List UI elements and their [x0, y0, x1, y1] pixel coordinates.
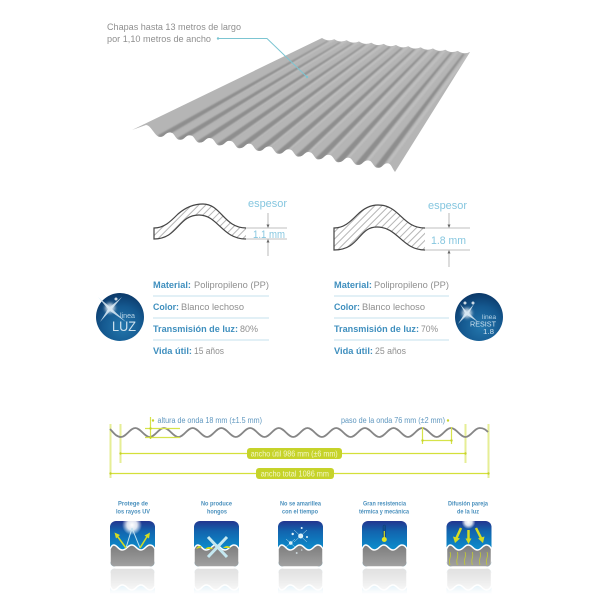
corrugated sheet illustration — [132, 38, 470, 172]
thickness dimension 1.1 mm: espesor — [248, 198, 287, 210]
thickness dimension 1.8 mm — [425, 200, 470, 267]
spec list: linea RESIST 1.8: Polipropileno (PP) — [374, 280, 449, 290]
badge: linea RESIST 1.8: RESIST — [470, 320, 496, 328]
badge: linea RESIST 1.8: 1.8 — [483, 327, 494, 336]
spec list: linea LUZ: Transmisión de luz: — [153, 324, 238, 334]
spec list: linea RESIST 1.8 — [334, 280, 449, 356]
feature: even light diffusion: Difusión pareja — [448, 501, 488, 508]
profile section 1.1 mm — [154, 204, 246, 239]
wave height dimension — [145, 416, 262, 439]
spec list: linea RESIST 1.8: Transmisión de luz: — [334, 324, 419, 334]
spec list: linea RESIST 1.8: Material: — [334, 280, 372, 290]
feature: no fungus: No produce — [201, 501, 232, 508]
spec list: linea LUZ: Vida útil: — [153, 346, 192, 356]
spec list: linea RESIST 1.8: Color: — [334, 302, 360, 312]
feature: UV protection — [110, 501, 155, 600]
useful width pill — [119, 448, 467, 459]
spec list: linea LUZ: 15 años — [194, 346, 224, 356]
feature: UV protection: Protege de — [118, 501, 148, 508]
badge: linea LUZ — [96, 293, 144, 341]
spec list: linea LUZ: Material: — [153, 280, 191, 290]
wave height dimension: altura de onda 18 mm (±1.5 mm) — [158, 416, 262, 425]
spec list: linea RESIST 1.8: Blanco lechoso — [362, 302, 425, 312]
thickness dimension 1.8 mm: 1.8 mm — [431, 235, 466, 247]
feature: no yellowing: con el tiempo — [282, 509, 318, 516]
feature: even light diffusion — [446, 501, 492, 600]
total width pill — [109, 468, 490, 479]
badge: linea RESIST 1.8: linea — [482, 314, 496, 321]
total width pill: ancho total 1086 mm — [261, 470, 329, 478]
spec list: linea RESIST 1.8: 25 años — [375, 346, 406, 356]
badge: linea LUZ: LUZ — [112, 318, 136, 334]
feature: no fungus — [194, 501, 239, 600]
width dimension guides — [110, 424, 489, 478]
sheet size note: por 1,10 metros de ancho — [107, 34, 211, 44]
thickness dimension 1.8 mm: espesor — [428, 200, 467, 212]
badge: linea RESIST 1.8 — [455, 293, 503, 341]
profile section 1.8 mm — [334, 205, 425, 250]
feature: no yellowing — [278, 501, 323, 600]
feature: no fungus: hongos — [207, 509, 227, 516]
wave pitch dimension: paso de la onda 76 mm (±2 mm) — [341, 416, 445, 425]
thickness dimension 1.1 mm — [246, 198, 287, 256]
badge: linea LUZ: linea — [120, 313, 135, 320]
feature: no yellowing: No se amarillea — [280, 501, 321, 508]
wave profile — [110, 428, 488, 437]
spec list: linea LUZ — [153, 280, 269, 356]
useful width pill: ancho útil 986 mm (±6 mm) — [251, 450, 338, 458]
spec list: linea LUZ: Polipropileno (PP) — [194, 280, 269, 290]
callout leader line — [217, 37, 308, 78]
spec list: linea RESIST 1.8: Vida útil: — [334, 346, 373, 356]
spec list: linea LUZ: 80% — [240, 324, 258, 334]
spec list: linea RESIST 1.8: 70% — [421, 324, 438, 334]
wave pitch dimension — [341, 416, 453, 444]
thickness dimension 1.1 mm: 1.1 mm — [253, 229, 285, 241]
feature: thermal and mechanical resistance: Gran resistencia — [363, 501, 406, 508]
feature: thermal and mechanical resistance — [359, 501, 409, 600]
feature: UV protection: los rayos UV — [116, 509, 151, 516]
feature: even light diffusion: de la luz — [457, 509, 480, 516]
feature: thermal and mechanical resistance: térmica y mecánica — [359, 509, 409, 516]
spec list: linea LUZ: Color: — [153, 302, 179, 312]
sheet size note — [107, 22, 241, 44]
spec list: linea LUZ: Blanco lechoso — [181, 302, 244, 312]
sheet size note: Chapas hasta 13 metros de largo — [107, 22, 241, 32]
